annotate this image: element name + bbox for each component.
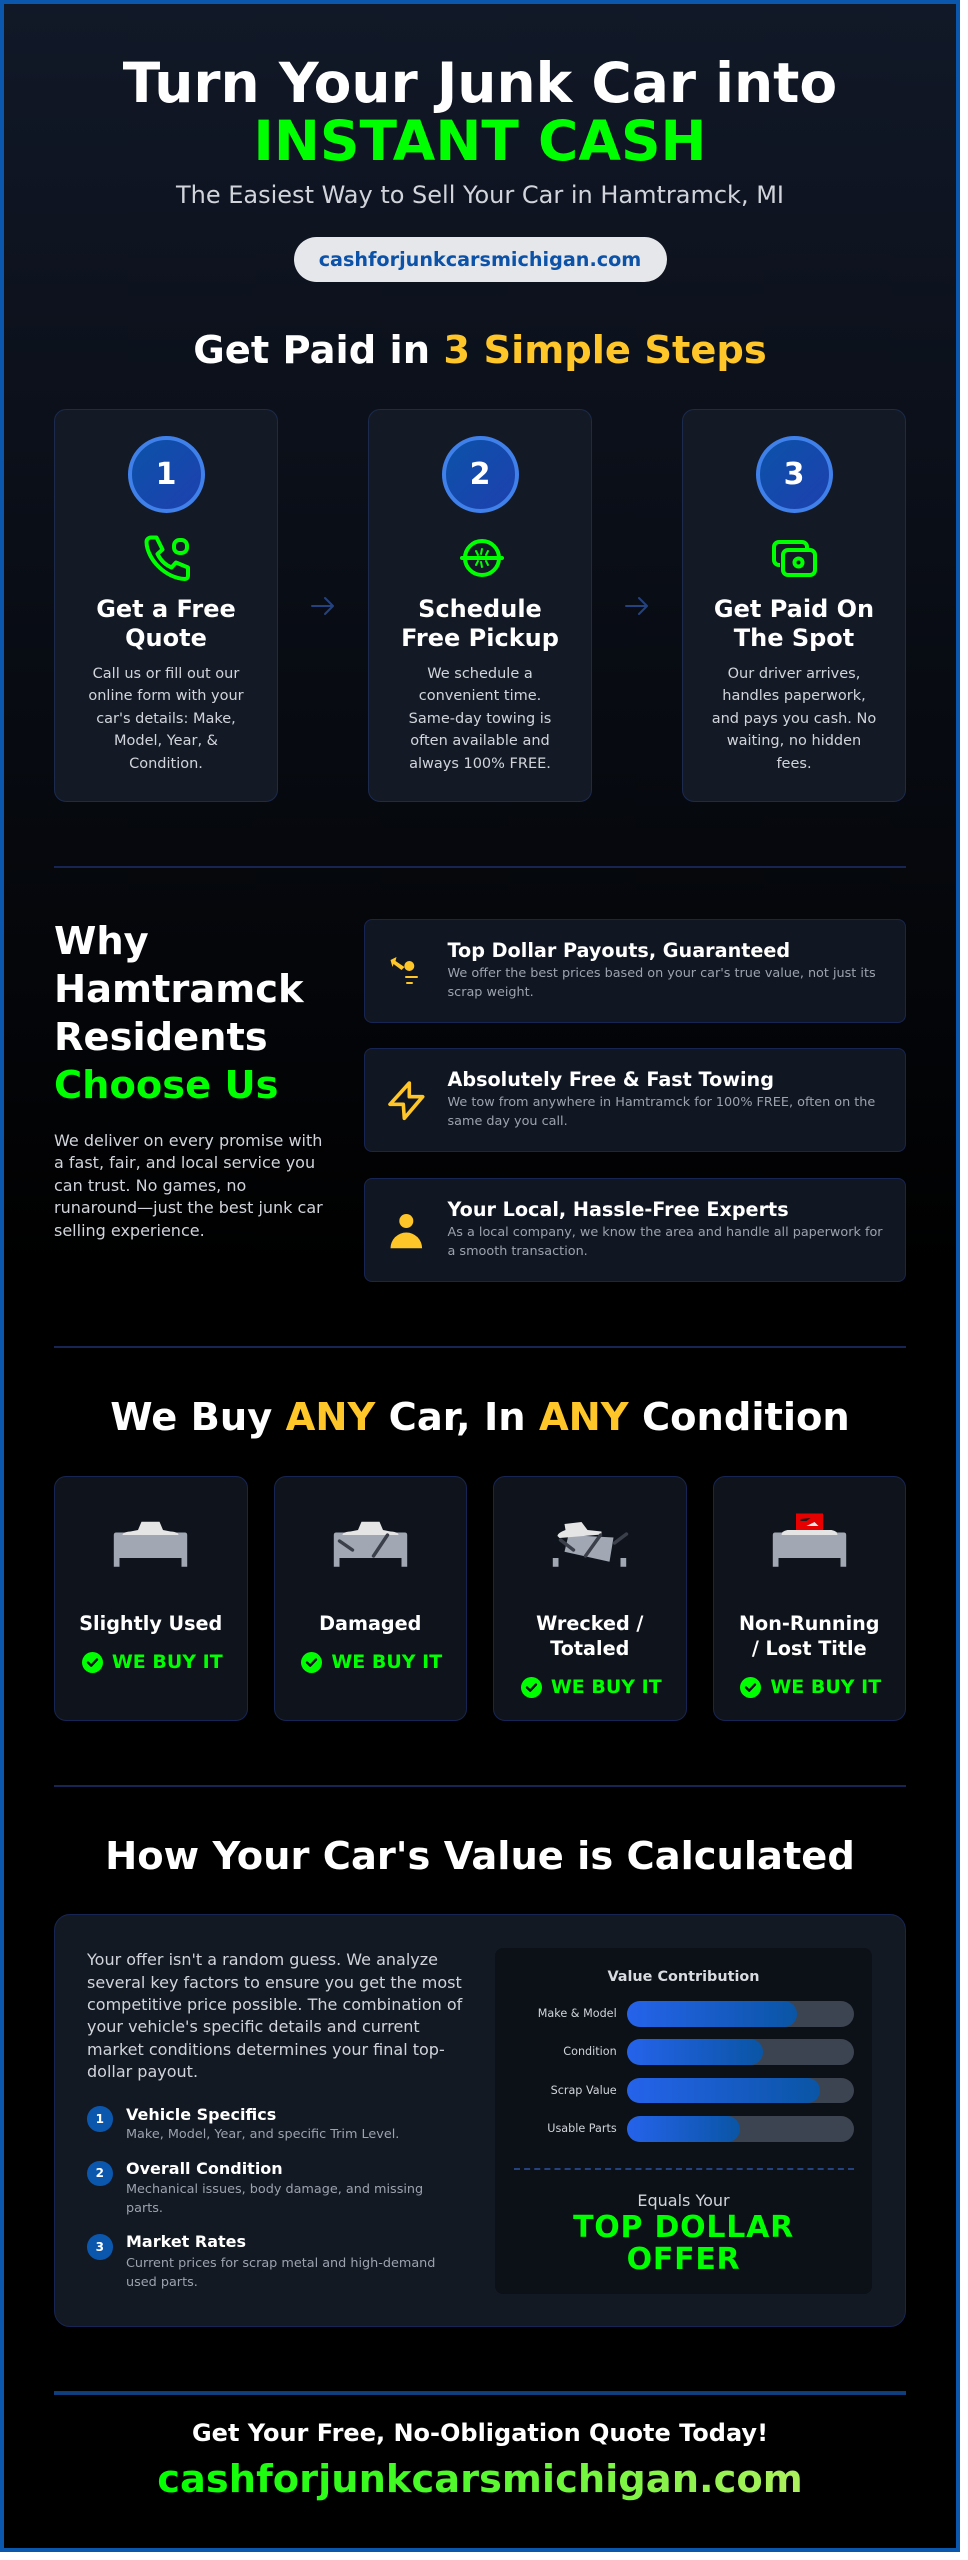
heading: why choose us: Choose Us [54,1063,279,1108]
panel: step 1 [54,409,278,802]
why paragraph: a fast, fair, and local service you [54,1153,315,1172]
step 3 text: waiting, no hidden [727,733,861,749]
badge: we buy it: WE BUY IT [112,1651,223,1673]
step 3 heading: The Spot [734,624,854,652]
icon: lightning bolt [388,1081,425,1120]
icon: phone [144,536,190,581]
step 2 heading: Schedule [418,594,542,622]
step 3 heading: Get Paid On [714,594,874,622]
feature 3 title: Your Local, Hassle-Free Experts [448,1198,789,1221]
why paragraph: can trust. No games, no [54,1176,246,1195]
icon: person [390,1214,422,1248]
arrow 1 [311,597,334,615]
icon: cash [772,540,817,577]
panel: value calculation [54,1914,906,2327]
why paragraph: We deliver on every promise with [54,1131,322,1150]
text: Vehicle Specifics [126,2104,276,2124]
value paragraph: Your offer isn't a random guess. We analyze [87,1950,438,1969]
call to action: Get Your Free, No-Obligation Quote Today! [192,2419,768,2447]
feature 1 text: scrap weight. [448,985,534,1000]
factor 3 [0,0,960,1]
badge: we buy it [714,1675,908,1699]
why paragraph [54,1131,323,1240]
heading: why choose us: Why [54,919,149,964]
top dollar offer [495,2212,872,2277]
subtitle: The Easiest Way to Sell Your Car in Hamtramck, MI [176,181,784,209]
step number 1 [128,436,204,513]
step 1 heading: Quote [125,624,207,652]
feature 1 title: Top Dollar Payouts, Guaranteed [448,939,790,962]
arrow 2 [625,597,648,615]
label: Damaged [319,1612,421,1635]
panel: non-running [713,1476,906,1721]
value paragraph: competitive price possible. The combination of [87,1995,462,2014]
text: 3 [96,2240,104,2254]
footer url: cashforjunkcarsmichigan.com [157,2457,803,2502]
title: INSTANT CASH [253,109,707,173]
text: used parts. [126,2275,198,2290]
step 1 text: car's details: Make, [96,711,236,727]
step 3 text: and pays you cash. No [712,711,876,727]
feature 2 text [448,1095,875,1129]
why paragraph: runaround—just the best junk car [54,1198,323,1217]
step number 3: 3 [784,457,804,492]
title [123,51,837,173]
value paragraph: several key factors to ensure you get the most [87,1973,462,1992]
badge: we buy it: WE BUY IT [331,1651,442,1673]
step number 1: 1 [156,457,176,492]
text: Make & Model [538,2007,617,2020]
panel: top dollar [364,919,906,1023]
value paragraph: your vehicle's specific details and current [87,2017,420,2036]
icon: payout [390,957,418,984]
feature 3 text [448,1224,883,1259]
bar chart [0,0,960,1]
step 2 heading: Free Pickup [401,624,559,652]
label [536,1612,644,1660]
text: Market Rates [126,2232,246,2251]
badge: we buy it: WE BUY IT [770,1676,881,1698]
step 2 text: convenient time. [419,688,541,704]
text: Current prices for scrap metal and high-demand [126,2256,435,2271]
top dollar offer: OFFER [627,2242,740,2277]
label: Wrecked / [536,1612,643,1635]
heading: steps: Get Paid in 3 Simple Steps [193,328,767,373]
text: 2 [96,2166,104,2180]
factor 2 [0,0,960,1]
step number 2 [442,436,518,513]
top dollar offer: TOP DOLLAR [573,2210,794,2245]
panel: wrecked [493,1476,687,1721]
step 3 text: Our driver arrives, [728,666,860,682]
step 1 text: Model, Year, & [114,733,218,749]
value paragraph: dollar payout. [87,2062,198,2081]
text: Scrap Value [551,2084,617,2097]
feature 2 text: We tow from anywhere in Hamtramck for 100% FREE, often on the [448,1095,875,1110]
panel: damaged [274,1476,467,1721]
step 1 text: Call us or fill out our [93,666,239,682]
step 1 text: Condition. [129,756,203,772]
step number 3 [756,436,832,513]
step 3 text [712,666,876,772]
icon: used car [114,1522,188,1567]
feature 2 title: Absolutely Free & Fast Towing [448,1068,774,1091]
panel: bar chart box [495,1948,872,2294]
step number 2: 2 [470,457,490,492]
panel: step 2 [368,409,592,802]
label [712,1611,906,1662]
panel: step 3 [682,409,906,802]
step 3 heading [714,594,874,652]
step 3 text: fees. [776,756,812,772]
feature 3 text: As a local company, we know the area and handle all paperwork for [448,1224,883,1240]
feature 2 text: same day you call. [448,1114,568,1129]
why paragraph: selling experience. [54,1221,205,1240]
step 2 text: always 100% FREE. [409,756,551,772]
label: Non-Running [739,1612,880,1635]
heading: any car: We Buy ANY Car, In ANY Condition [110,1395,850,1440]
panel: local experts [364,1178,906,1282]
equals label: Equals Your [637,2190,730,2210]
step 1 heading [96,594,236,652]
heading: why choose us: Residents [54,1015,268,1060]
value paragraph [87,1949,462,2084]
icon: wrecked car [552,1522,628,1567]
icon: damaged car [334,1522,408,1567]
website pill: cashforjunkcarsmichigan.com [319,248,641,271]
badge: we buy it: WE BUY IT [551,1676,662,1698]
feature 1 text [448,966,876,1000]
step 2 text: often available and [410,733,550,749]
heading: why choose us: Hamtramck [54,967,304,1012]
feature 1 text: We offer the best prices based on your car's true value, not just its [448,966,876,981]
text: Overall Condition [126,2158,283,2178]
panel: free towing [364,1048,906,1152]
chart title: Value Contribution [607,1969,760,1985]
text: Make, Model, Year, and specific Trim Level. [126,2127,399,2142]
step 2 heading [401,594,559,652]
feature 3 text: a smooth transaction. [448,1244,588,1259]
panel: slightly used [54,1476,248,1721]
label: Totaled [550,1637,629,1660]
text: Mechanical issues, body damage, and missing [126,2182,423,2197]
text: Usable Parts [547,2122,617,2135]
step 2 text: We schedule a [427,666,533,682]
website pill [294,237,666,282]
icon: pickup wheel [460,539,504,577]
label: / Lost Title [752,1637,867,1660]
step 1 text [88,666,244,772]
factor 1 [0,0,960,1]
title: Turn Your Junk Car into [123,51,837,115]
step 2 text: Same-day towing is [409,711,551,727]
text: Condition [563,2045,617,2058]
step 1 heading: Get a Free [96,594,236,622]
step 1 text: online form with your [88,688,244,704]
text: parts. [126,2201,163,2216]
icon: non-running car [772,1514,846,1567]
heading: why choose us [54,919,304,1108]
label: Slightly Used [79,1612,222,1635]
heading: value: How Your Car's Value is Calculated [105,1834,855,1879]
value paragraph: market conditions determines your final top- [87,2040,445,2059]
step 3 text: handles paperwork, [722,688,866,704]
step 2 text [409,666,551,772]
text: 1 [96,2112,104,2126]
